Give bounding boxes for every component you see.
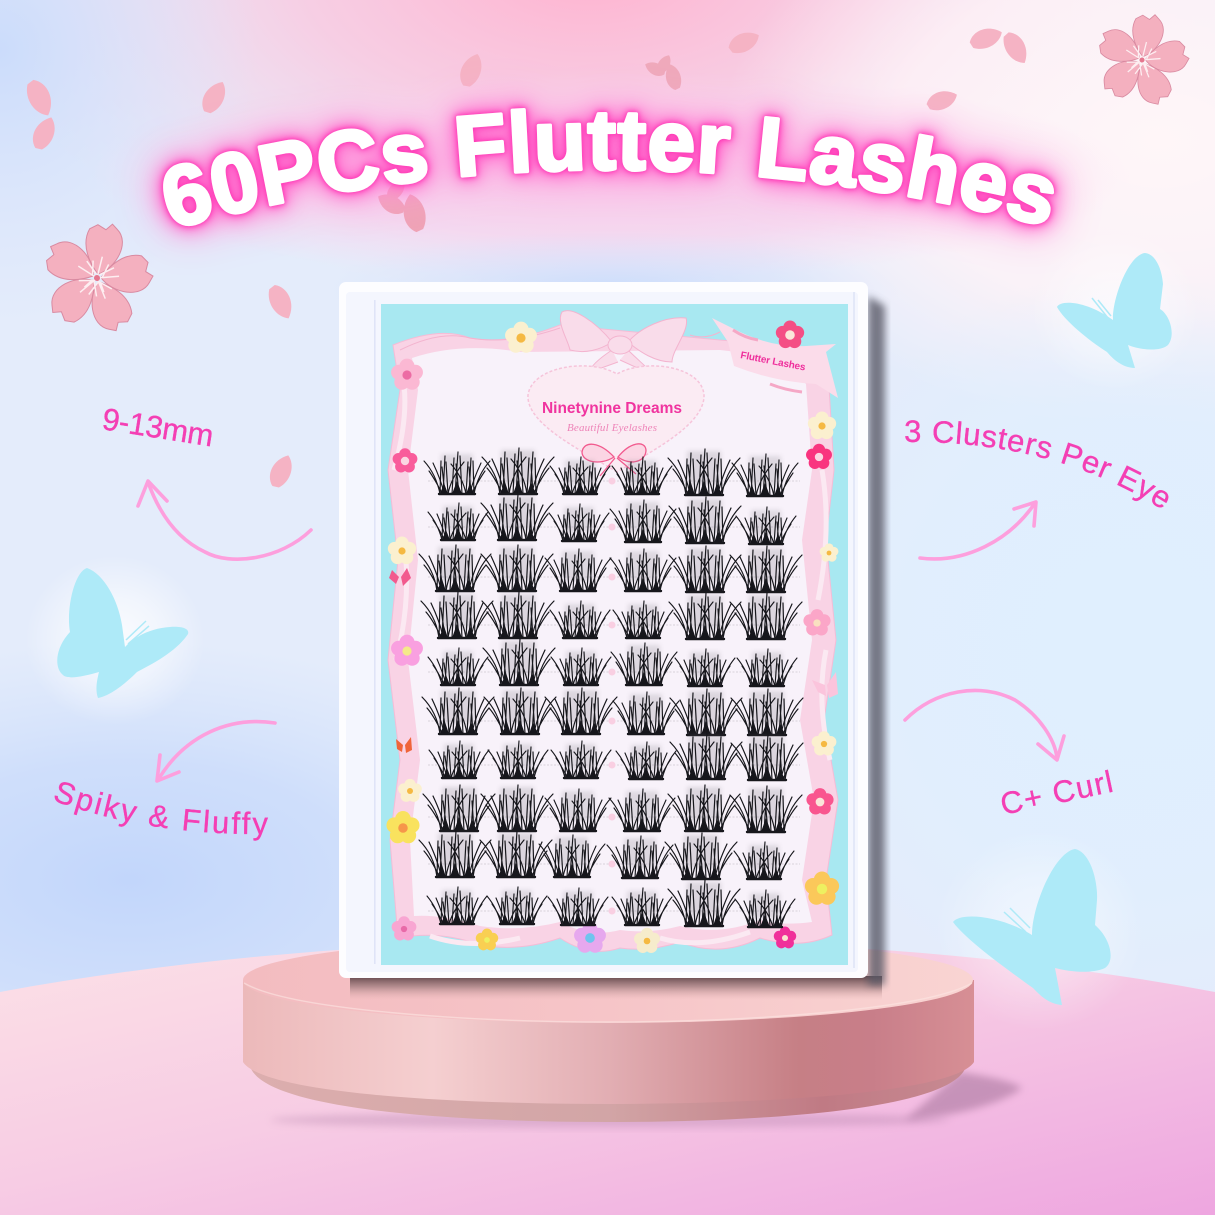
ribbon banner: Flutter Lashes xyxy=(739,350,807,374)
floor xyxy=(0,940,1215,1215)
card teal backing xyxy=(381,304,848,965)
small red bow xyxy=(582,444,646,476)
flower fragment top xyxy=(643,53,684,92)
label: 9-13mm: 9-13mm xyxy=(100,401,216,453)
row guide lines xyxy=(428,481,800,911)
product case xyxy=(339,282,868,978)
flower: top right xyxy=(1082,2,1201,118)
scattered petals xyxy=(22,24,1033,491)
pedestal xyxy=(243,937,1022,1128)
tiny butterflies xyxy=(389,568,838,753)
title: 60PCs Flutter Lashes xyxy=(135,86,1080,253)
label: C+ Curl: C+ Curl xyxy=(997,764,1116,822)
butterfly: bottom right xyxy=(935,830,1145,1030)
heart badge xyxy=(528,366,704,472)
product shadow xyxy=(350,296,885,1000)
small flowers xyxy=(386,320,839,953)
card paper xyxy=(408,348,814,933)
butterfly: left xyxy=(25,555,205,725)
butterfly: top right xyxy=(1030,230,1200,390)
arrow: to 9-13mm xyxy=(138,481,311,559)
flower: big left xyxy=(26,209,167,348)
sheet hearts xyxy=(608,478,616,914)
label: Spiky & Fluffy: Spiky & Fluffy xyxy=(54,782,268,841)
label: 3 Clusters Per Eye: 3 Clusters Per Eye xyxy=(905,420,1168,508)
arrow: to 3 Clusters xyxy=(920,502,1036,559)
bow top xyxy=(400,311,720,376)
arrow: to C+ Curl xyxy=(905,690,1064,760)
brand name: Ninetynine Dreams xyxy=(542,400,682,417)
ribbon banner xyxy=(712,318,838,398)
flower fragment under title xyxy=(374,177,429,234)
ribbon frame xyxy=(388,325,838,951)
arrow: to Spiky & Fluffy xyxy=(157,722,275,781)
lash clusters 6 by 10 xyxy=(419,448,803,927)
ribbon wave lines xyxy=(394,385,830,944)
tagline: Beautiful Eyelashes xyxy=(567,422,657,434)
